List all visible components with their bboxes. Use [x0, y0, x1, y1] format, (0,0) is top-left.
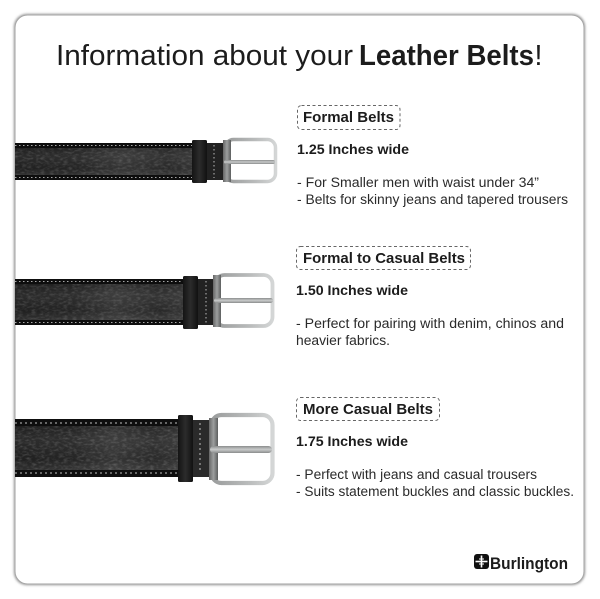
- title: Information about your: [56, 40, 354, 72]
- description: formal belts: [297, 175, 568, 207]
- description: formal to casual belts: [296, 316, 564, 348]
- description: formal to casual belts: - Perfect for pairing with denim, chinos and: [296, 316, 564, 331]
- label: More Casual Belts: [296, 398, 440, 420]
- description: formal to casual belts: heavier fabrics.: [296, 333, 390, 348]
- description: more casual belts: - Suits statement buckles and classic buckles.: [296, 484, 574, 499]
- width: 1.75 inches: 1.75 Inches wide: [296, 434, 409, 449]
- width: 1.25 inches: 1.25 Inches wide: [297, 142, 410, 157]
- title: !: [534, 40, 542, 72]
- description: formal belts: - For Smaller men with waist under 34”: [297, 175, 539, 190]
- belt: 1.25 inches: [15, 140, 276, 183]
- label: Formal to Casual Belts: [296, 246, 470, 270]
- belt: 1.75 inches: [15, 415, 272, 483]
- icon: Burlington cross emblem: [474, 554, 489, 569]
- belt: 1.50 inches: [15, 275, 273, 329]
- title: Leather Belts: [359, 40, 534, 72]
- width: 1.50 inches: 1.50 Inches wide: [296, 283, 409, 298]
- logo: Burlington: Burlington: [490, 554, 568, 573]
- label: Formal Belts: [298, 106, 400, 130]
- description: more casual belts: [296, 467, 574, 499]
- description: more casual belts: - Perfect with jeans and casual trousers: [296, 467, 537, 482]
- label: Formal Belts: Formal Belts: [303, 109, 394, 126]
- label: More Casual Belts: More Casual Belts: [303, 401, 433, 418]
- label: Formal to Casual Belts: Formal to Casual Belts: [303, 250, 465, 267]
- description: formal belts: - Belts for skinny jeans and tapered trousers: [297, 192, 568, 207]
